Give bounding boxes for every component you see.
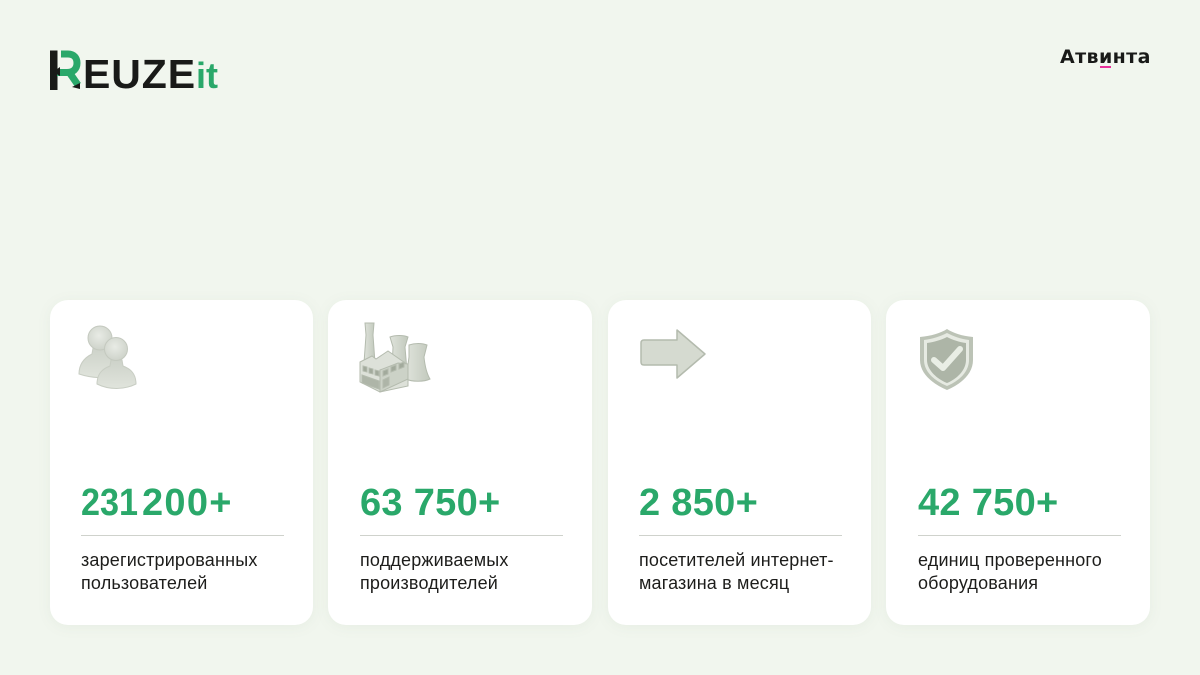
stat label: единиц проверенного — [918, 550, 1102, 570]
icon: shield with check — [920, 329, 973, 390]
stat label: зарегистрированных — [81, 550, 258, 570]
stat label — [81, 550, 258, 593]
icon: factory — [360, 322, 431, 393]
stat label — [360, 550, 509, 593]
icon: users — [78, 326, 136, 389]
panel: online store visitors — [608, 300, 871, 625]
panel: registered users — [50, 300, 313, 625]
stat label: магазина в месяц — [639, 573, 789, 593]
icon: arrow — [640, 329, 706, 379]
stat label: поддерживаемых — [360, 550, 509, 570]
stat number: 231 — [81, 482, 138, 524]
partner logo: Атвинта: Атвинта — [1060, 46, 1151, 68]
panel: supported manufacturers — [328, 300, 592, 625]
stat label — [918, 550, 1102, 593]
stat label: пользователей — [81, 573, 208, 593]
stat number: 63 750+ — [360, 482, 501, 524]
stat label — [639, 550, 834, 593]
icon: R letter mark — [50, 50, 81, 90]
stat label: производителей — [360, 573, 498, 593]
stat number: 42 750+ — [918, 482, 1059, 524]
stat number — [81, 482, 233, 524]
stat label: оборудования — [918, 573, 1038, 593]
stat number: 200+ — [142, 482, 233, 524]
stat number: 2 850+ — [639, 482, 758, 524]
logo wordmark: EUZEit — [83, 51, 218, 97]
logo: REUZEit — [50, 50, 218, 97]
panel: verified equipment — [886, 300, 1150, 625]
stat label: посетителей интернет- — [639, 550, 834, 570]
